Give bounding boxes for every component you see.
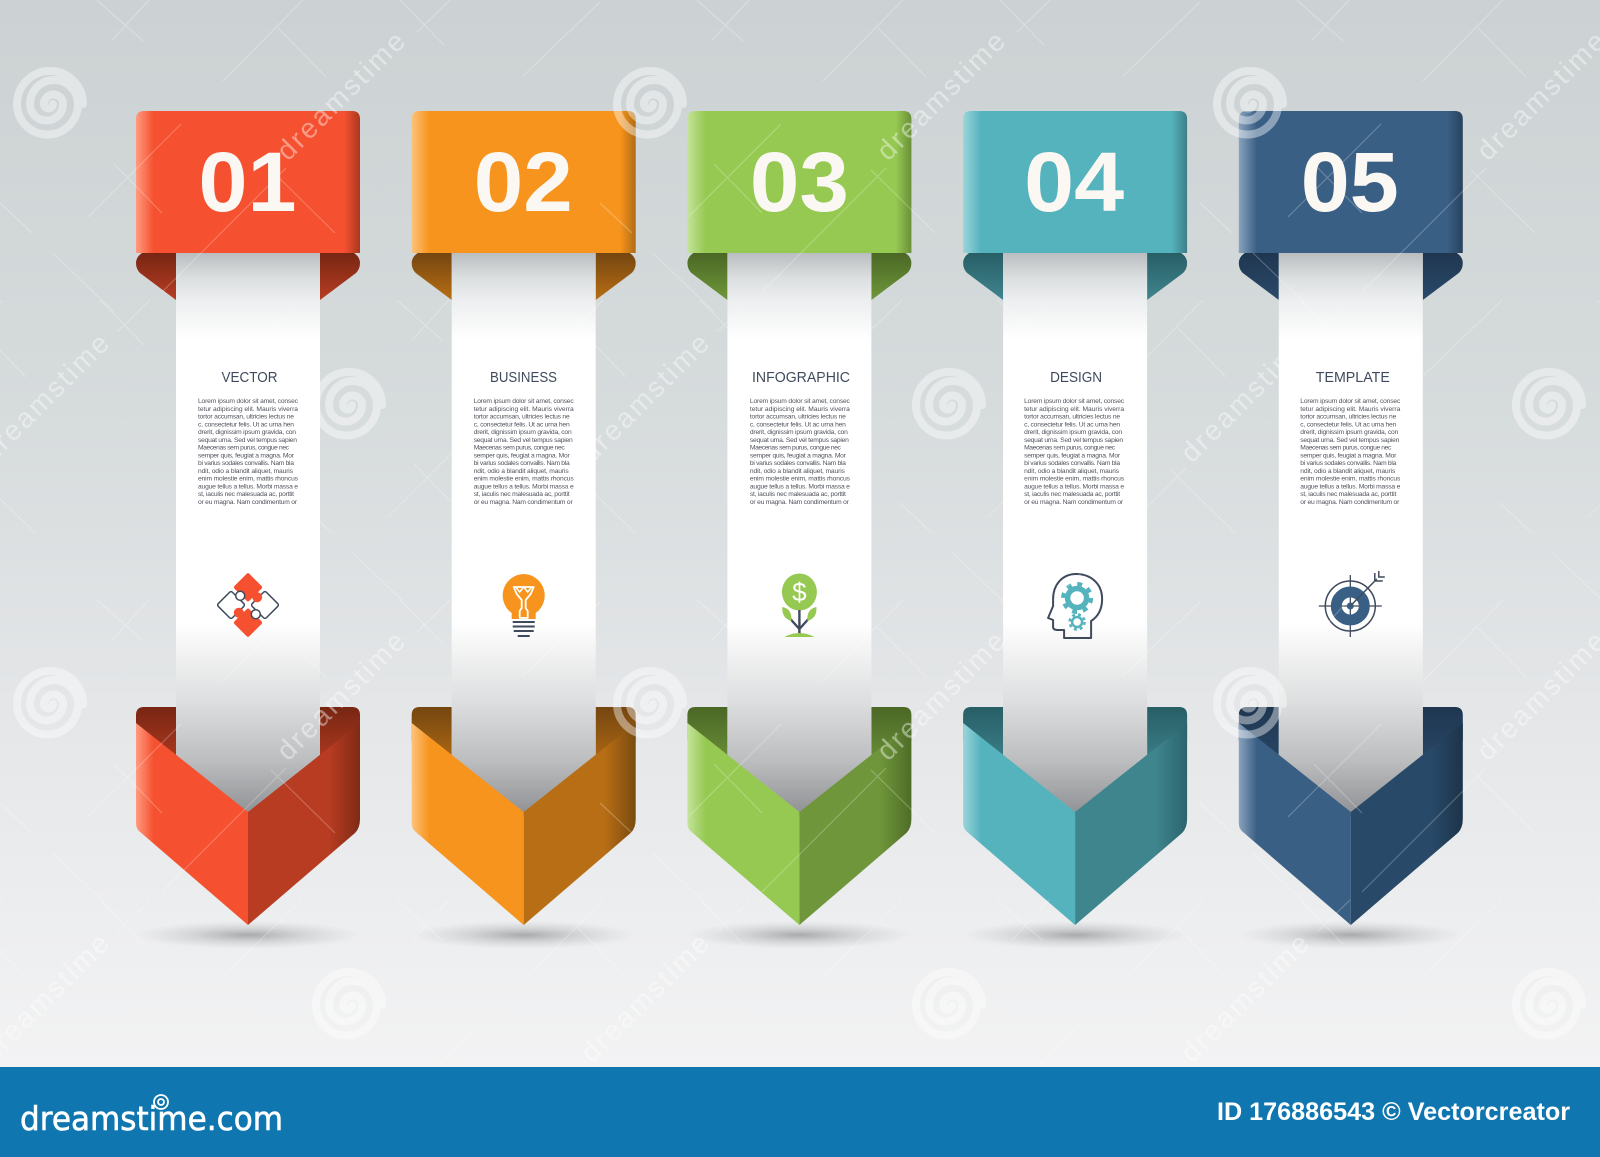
body text: bi varius sodales convallis. Nam bla (1300, 460, 1397, 467)
body text: augue tellus a tellus. Morbi massa e (1024, 484, 1124, 490)
body text: st, iaculis nec malesuada ac, porttit (1300, 491, 1396, 498)
arrow left face (963, 723, 1075, 925)
body text: Lorem ipsum dolor sit amet, consec (750, 398, 851, 405)
top back flaps (136, 253, 360, 300)
body text: semper quis, feugiat a magna. Mor (1300, 452, 1397, 459)
body text: tetur adipiscing elit. Mauris viverra (198, 406, 298, 413)
watermark overlay: dreamstime (270, 626, 411, 766)
body text: tortor accumsan, ultricies lectus ne (1024, 414, 1120, 420)
watermark overlay: dreamstime (574, 328, 715, 468)
body text: ndit, odio a blandit aliquet, mauris (750, 468, 846, 475)
floor shadow (136, 921, 360, 949)
watermark overlay: dreamstime (1174, 328, 1315, 468)
body text: bi varius sodales convallis. Nam bla (198, 460, 294, 467)
number: 04 (1024, 135, 1124, 229)
body text: bi varius sodales convallis. Nam bla (1024, 460, 1120, 467)
panel: column 02 BUSINESS (412, 111, 636, 949)
number tab (1239, 111, 1463, 253)
heading: BUSINESS (490, 370, 557, 386)
body text: tetur adipiscing elit. Mauris viverra (1300, 406, 1401, 413)
body text: drerit, dignissim ipsum gravida, con (198, 429, 296, 436)
number: 03 (750, 135, 849, 229)
arrow left face (136, 723, 248, 925)
body text: Maecenas sem purus, congue nec (750, 445, 842, 452)
body text: c, consectetur felis. Ut ac urna hen (474, 421, 570, 428)
arrow right face (1075, 723, 1187, 925)
body text: semper quis, feugiat a magna. Mor (198, 452, 295, 459)
body text: tortor accumsan, ultricies lectus ne (1300, 414, 1397, 420)
body text: st, iaculis nec malesuada ac, porttit (198, 491, 294, 498)
body text: augue tellus a tellus. Morbi massa e (750, 484, 850, 490)
body text: Maecenas sem purus, congue nec (1300, 445, 1392, 452)
panel: column 03 INFOGRAPHIC (687, 111, 911, 949)
body text (750, 398, 851, 506)
body text: or eu magna. Nam condimentum or (474, 499, 573, 506)
icon: light bulb (503, 574, 545, 636)
bottom back flaps (963, 707, 1187, 771)
arrow right face (799, 723, 911, 925)
top back flaps (963, 253, 1187, 300)
top back flaps (1239, 253, 1463, 300)
body text: c, consectetur felis. Ut ac urna hen (1300, 421, 1397, 428)
bottom back flaps (136, 707, 360, 771)
body text (198, 398, 299, 506)
body text: augue tellus a tellus. Morbi massa e (474, 484, 574, 490)
body text: bi varius sodales convallis. Nam bla (474, 460, 570, 467)
body text: enim molestie enim, mattis rhoncus (750, 476, 851, 483)
body text: ndit, odio a blandit aliquet, mauris (198, 468, 294, 475)
number tab (687, 111, 911, 253)
body text: sequat urna. Sed vel tempus sapien (198, 437, 297, 444)
body text: tortor accumsan, ultricies lectus ne (198, 414, 294, 420)
body text: sequat urna. Sed vel tempus sapien (1300, 437, 1400, 444)
bottom back flaps (1239, 707, 1463, 771)
white strip (1003, 253, 1147, 816)
body text: c, consectetur felis. Ut ac urna hen (1024, 421, 1120, 428)
body text: ndit, odio a blandit aliquet, mauris (1300, 468, 1396, 475)
body text: augue tellus a tellus. Morbi massa e (198, 484, 298, 490)
body text: Lorem ipsum dolor sit amet, consec (474, 398, 574, 405)
heading: INFOGRAPHIC (752, 370, 850, 386)
body text: st, iaculis nec malesuada ac, porttit (750, 491, 846, 498)
arrow left face (412, 723, 524, 925)
white strip (452, 253, 596, 816)
body text: semper quis, feugiat a magna. Mor (1024, 452, 1121, 459)
body text: enim molestie enim, mattis rhoncus (474, 476, 574, 483)
body text: drerit, dignissim ipsum gravida, con (1300, 429, 1399, 436)
watermark overlay: dreamstime (870, 26, 1011, 166)
arrow left face (687, 723, 799, 925)
body text: Lorem ipsum dolor sit amet, consec (1024, 398, 1125, 405)
body text: drerit, dignissim ipsum gravida, con (1024, 429, 1122, 436)
body text: enim molestie enim, mattis rhoncus (1300, 476, 1401, 483)
body text: sequat urna. Sed vel tempus sapien (1024, 437, 1123, 444)
bottom back flaps (687, 707, 911, 771)
body text: tetur adipiscing elit. Mauris viverra (1024, 406, 1124, 413)
body text: tetur adipiscing elit. Mauris viverra (474, 406, 574, 413)
number: 02 (474, 135, 573, 229)
body text: augue tellus a tellus. Morbi massa e (1300, 484, 1401, 490)
body text: Lorem ipsum dolor sit amet, consec (1300, 398, 1401, 405)
number: 01 (198, 135, 296, 229)
watermark overlay: dreamstime (574, 928, 715, 1068)
body text: Maecenas sem purus, congue nec (474, 445, 565, 452)
body text: Lorem ipsum dolor sit amet, consec (198, 398, 299, 405)
body text: enim molestie enim, mattis rhoncus (1024, 476, 1125, 483)
floor shadow (963, 921, 1187, 949)
watermark overlay: dreamstime (270, 26, 411, 166)
arrow right face (1351, 723, 1463, 925)
footer bar (0, 1067, 1600, 1157)
footer logo text: dreamstime.com (20, 1099, 283, 1138)
body text: sequat urna. Sed vel tempus sapien (750, 437, 849, 444)
top back flaps (687, 253, 911, 300)
white strip (727, 253, 871, 816)
body text: Maecenas sem purus, congue nec (1024, 445, 1116, 452)
arrow right face (524, 723, 636, 925)
body text: semper quis, feugiat a magna. Mor (474, 452, 570, 459)
body text: drerit, dignissim ipsum gravida, con (750, 429, 848, 436)
body text: bi varius sodales convallis. Nam bla (750, 460, 846, 467)
icon: money plant (782, 574, 817, 637)
arrow left face (1239, 723, 1351, 925)
watermark overlay: dreamstime (1174, 928, 1315, 1068)
body text (1300, 398, 1401, 506)
number tab (963, 111, 1187, 253)
heading: DESIGN (1050, 370, 1102, 386)
floor shadow (1239, 921, 1463, 949)
icon: money plant: $ (792, 577, 807, 607)
body text: or eu magna. Nam condimentum or (198, 499, 298, 506)
icon: head with gears (1048, 574, 1102, 638)
body text (1024, 398, 1125, 506)
arrow right face (248, 723, 360, 925)
body text: c, consectetur felis. Ut ac urna hen (198, 421, 294, 428)
number tab (412, 111, 636, 253)
icon: puzzle (215, 572, 281, 638)
body text: enim molestie enim, mattis rhoncus (198, 476, 299, 483)
body text: drerit, dignissim ipsum gravida, con (474, 429, 572, 436)
body text: semper quis, feugiat a magna. Mor (750, 452, 847, 459)
bottom back flaps (412, 707, 636, 771)
heading: VECTOR (222, 370, 278, 386)
body text: tortor accumsan, ultricies lectus ne (750, 414, 846, 420)
heading: TEMPLATE (1316, 370, 1390, 386)
icon: logo spiral (154, 1095, 168, 1109)
white strip (1279, 253, 1423, 816)
body text: Maecenas sem purus, congue nec (198, 445, 290, 452)
body text: or eu magna. Nam condimentum or (1300, 499, 1400, 506)
body text: or eu magna. Nam condimentum or (750, 499, 850, 506)
body text: st, iaculis nec malesuada ac, porttit (1024, 491, 1120, 498)
body text: ndit, odio a blandit aliquet, mauris (474, 468, 569, 475)
floor shadow (687, 921, 911, 949)
number tab (136, 111, 360, 253)
top back flaps (412, 253, 636, 300)
watermark overlay: dreamstime (870, 626, 1011, 766)
floor shadow (412, 921, 636, 949)
white strip (176, 253, 320, 816)
icon: target with arrow (1319, 571, 1385, 637)
body text: sequat urna. Sed vel tempus sapien (474, 437, 573, 444)
body text: ndit, odio a blandit aliquet, mauris (1024, 468, 1120, 475)
panel: column 04 DESIGN (963, 111, 1187, 949)
body text (474, 398, 574, 506)
image credit: ID 176886543 © Vectorcreator (1217, 1098, 1570, 1126)
body text: tetur adipiscing elit. Mauris viverra (750, 406, 850, 413)
panel: column 05 TEMPLATE (1239, 111, 1463, 949)
number: 05 (1301, 135, 1399, 229)
body text: st, iaculis nec malesuada ac, porttit (474, 491, 570, 498)
body text: tortor accumsan, ultricies lectus ne (474, 414, 570, 420)
panel: column 01 VECTOR (136, 111, 360, 949)
body text: or eu magna. Nam condimentum or (1024, 499, 1124, 506)
body text: c, consectetur felis. Ut ac urna hen (750, 421, 846, 428)
